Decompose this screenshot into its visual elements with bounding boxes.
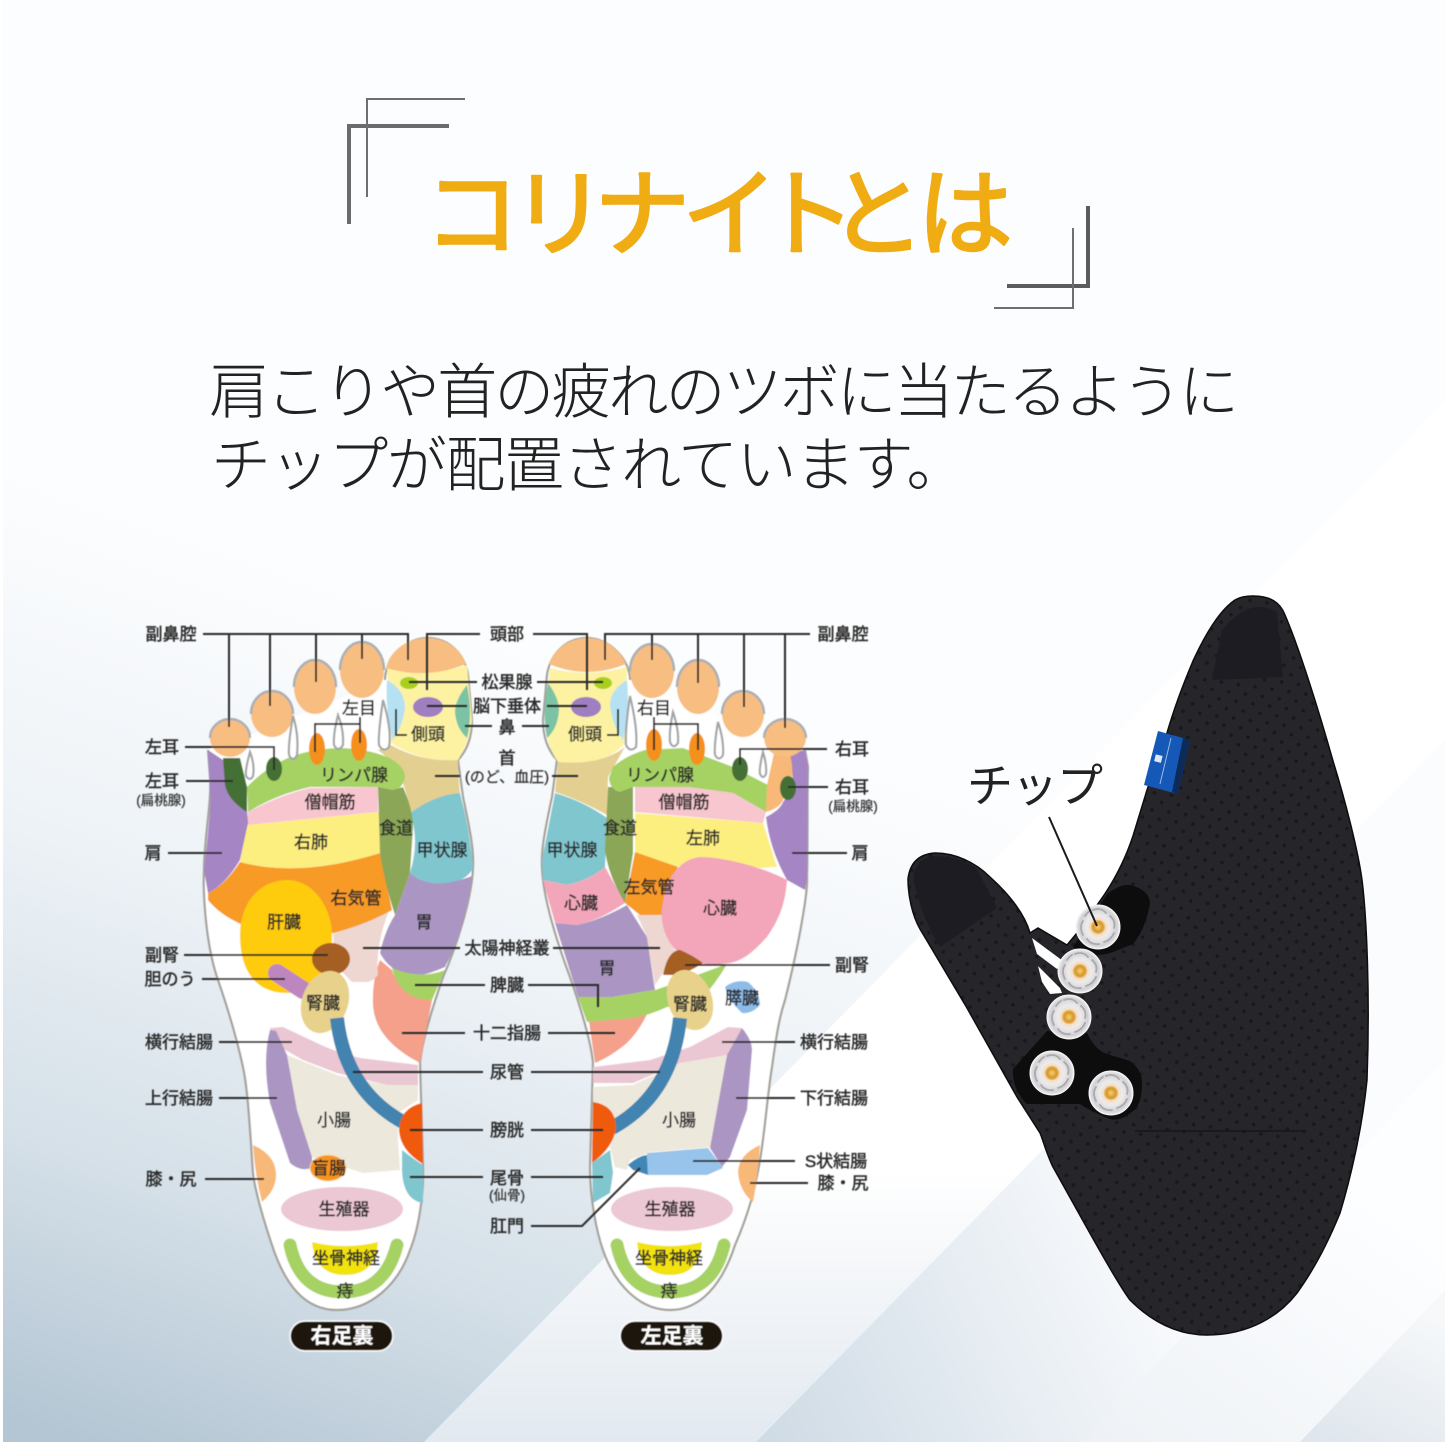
organ labels: 食道 [379,819,413,838]
label: 肩 [144,844,222,863]
zone: descending colon [710,1028,752,1167]
label: 尿管: 尿管 [490,1063,524,1082]
zone: solar plexus [637,915,677,985]
zone: heart small [543,867,625,925]
organ labels: 小腸 [317,1111,351,1130]
organ labels: 腎臓 [306,994,340,1013]
zone: transverse colon [593,1027,742,1083]
zone: bladder [399,1103,423,1164]
zone: hip [738,1145,760,1202]
zone: tonsil [223,758,247,812]
centre labels between feet [353,625,660,1236]
foot name pill: 右足裏 [290,1321,393,1351]
label: 下行結腸 [736,1089,868,1108]
zone: small intestine [287,1055,418,1173]
zone: lung [240,812,380,868]
organ labels [267,766,468,1301]
label: 副鼻腔 left [146,625,408,727]
label: 尾骨 [410,1169,603,1203]
label: 膝・尻 [146,1170,264,1189]
label: 右目 [637,699,698,750]
zone: pituitary [571,697,601,717]
organ labels [546,766,759,1301]
zone: adrenal [312,943,350,975]
zone: pancreas [725,981,760,1013]
label: 横行結腸: 横行結腸 [800,1033,868,1052]
label: 尾骨: 尾骨 [490,1169,524,1188]
title: コリナイトとは [424,162,1013,269]
zone: coccyx [592,1150,613,1203]
label: 側頭 [396,709,445,744]
zone: nose [545,683,559,738]
label: 膝・尻: 膝・尻 [818,1174,868,1193]
label: 頭部 [427,625,587,690]
zone: sigmoid colon [647,1148,723,1175]
zone: trachea [208,853,392,933]
label: 下行結腸: 下行結腸 [800,1089,868,1108]
organ labels: 生殖器 [318,1200,370,1219]
zone: esophagus [605,787,633,903]
zone: trapezius [247,787,378,825]
organ labels: 僧帽筋 [658,793,710,812]
label: 胆のう: 胆のう [144,970,196,989]
label: 鼻: 鼻 [498,718,516,737]
body text: 肩こりや首の疲れのツボに当たるように [209,359,1239,426]
zone: duodenum [588,1012,648,1063]
label: 側頭: 側頭 [568,725,602,744]
organ labels: 腎臓 [673,995,707,1014]
zone: liver [240,880,332,993]
organ labels: 生殖器 [644,1200,696,1219]
label: 肛門: 肛門 [490,1217,524,1236]
seam [1135,1130,1305,1132]
label: 側頭 [568,709,618,744]
organ labels: 膵臓 [725,989,759,1008]
zone: neck [378,745,460,813]
zone: genitals [611,1187,733,1231]
label: 左耳 扁桃腺: 左耳 [145,772,179,791]
label: 肛門 [490,1168,640,1236]
label: 脾臓: 脾臓 [490,976,524,995]
zone: sciatic [312,1242,378,1275]
zone: trachea [625,852,678,915]
organ labels: 左気管 [624,878,674,897]
label: 左目 [315,699,376,752]
zone: duodenum [373,960,432,1063]
zone: big toe sinus [549,638,626,672]
toe gaps [626,696,766,777]
foot name pill: 左足裏: 左足裏 [640,1325,704,1348]
label: 太陽神経叢: 太陽神経叢 [464,939,550,958]
label: 上行結腸 [145,1089,277,1108]
velcro patch left [913,856,997,947]
label: 首: 首 [498,749,516,768]
blue brand tag [1144,731,1190,794]
toe gaps [246,700,390,779]
organ labels: 食道 [603,819,637,838]
toes [630,644,806,757]
zone: kidney [292,964,358,1040]
orange oval eye points [646,729,705,765]
strap holes [1032,938,1063,994]
organ labels: リンパ腺 [320,766,388,785]
chip backing upper [1073,885,1150,955]
zone: small intestine [593,1055,727,1170]
organ labels: 盲腸 [312,1159,346,1178]
label: 右耳: 右耳 [835,740,869,759]
organ labels: 胃 [598,959,616,978]
chip backing lower [1013,1031,1142,1120]
label: 膀胱: 膀胱 [490,1121,524,1140]
label: 右耳 扁桃腺 [788,778,878,814]
organ labels: 心臓 [564,894,598,913]
organ labels: 右肺 [294,833,328,852]
organ labels: 小腸 [662,1111,696,1130]
zone: stomach [555,905,655,997]
zone: solar plexus [333,908,390,982]
zone: sciatic [637,1242,702,1275]
zone: hemorrhoid arc [617,1245,724,1292]
zone: hemorrhoid arc [290,1245,397,1292]
ear points [732,757,796,800]
zone: nose [455,685,470,738]
callout: チップ with pointer line: チップ [967,760,1103,812]
label: 副鼻腔 right [605,625,868,728]
zone: cecum [310,1155,346,1181]
label: 尾骨: (仙骨) [489,1188,525,1203]
zone: head yellow [545,667,627,763]
zone: transverse colon [270,1027,418,1085]
label: 横行結腸: 横行結腸 [145,1033,213,1052]
zone: temple blue [610,680,628,740]
zone: pituitary [413,697,443,717]
label: 首: (のど、血圧) [465,769,549,786]
label: 首 [435,749,578,786]
label: 膝・尻 [750,1174,868,1193]
label: 側頭: 側頭 [411,725,445,744]
label: 左耳 扁桃腺 [136,772,233,808]
zone: spleen [392,968,445,1000]
zone: esophagus [378,787,413,915]
zone: thyroid [410,793,473,887]
label: 右耳 扁桃腺: (扁桃腺) [828,799,878,814]
zone: head yellow [387,665,472,760]
zone: pineal [400,677,418,689]
foot name pill: 右足裏: 右足裏 [310,1325,374,1348]
foot diagram: right sole (shown left) [136,625,473,1351]
label: 脳下垂体: 脳下垂体 [473,697,541,716]
label: 頭部: 頭部 [490,625,524,644]
label: 膝・尻: 膝・尻 [146,1170,196,1189]
label: 副腎: 副腎 [145,946,179,965]
sole outline [542,638,808,1310]
product photo: black pad [908,596,1368,1335]
label: 左耳: 左耳 [145,738,179,757]
label: 肩: 肩 [144,844,162,863]
zone: lung [635,813,777,868]
zone: lymph [609,748,768,812]
pad body [908,596,1368,1335]
label: 副鼻腔 left: 副鼻腔 [146,625,196,644]
organ labels: 甲状腺 [546,841,598,860]
title bracket: top left [349,99,464,222]
zone: bladder [592,1102,616,1163]
label: 右耳 [740,740,869,765]
sole outline [204,638,473,1310]
zone: kidney [659,963,721,1037]
label: S状結腸: S状結腸 [805,1152,867,1171]
organ labels: 心臓 [703,899,737,918]
organ labels: 痔 [660,1282,678,1301]
label: 左耳 [145,738,274,770]
massage chips [1030,905,1133,1115]
zone: thyroid [542,793,607,885]
zone: spleen [578,964,727,1022]
zone: ureter [337,1018,403,1122]
zone: ureter [612,1018,680,1128]
foot diagram: left sole (shown right) [542,625,878,1351]
velcro patch top [1212,607,1283,680]
body text [209,359,1239,499]
organ labels: 痔 [336,1282,354,1301]
zone: anus [628,1155,648,1175]
label: 十二指腸: 十二指腸 [473,1024,541,1043]
zone: gallbladder [277,973,303,990]
label: 肩: 肩 [852,844,868,863]
zone: shoulder orange [766,735,793,812]
ear point [266,757,282,781]
title bracket: bottom right [995,208,1088,308]
label: 右耳 扁桃腺: 右耳 [835,778,869,797]
label: 脾臓 [415,976,598,1007]
organ labels: 僧帽筋 [304,793,356,812]
zone: hip [253,1145,276,1202]
label: 鼻 [465,718,549,737]
label: 右目: 右目 [637,699,671,718]
organ labels: リンパ腺 [626,766,694,785]
zone: temple blue [387,680,405,740]
organ labels: 胃 [416,913,432,932]
label: 肩 [792,844,868,863]
organ labels: 坐骨神経 [635,1249,703,1268]
label: 左耳 扁桃腺: (扁桃腺) [136,793,186,808]
orange oval eye points [309,729,367,765]
zone: big toe sinus [386,638,466,673]
zone: ascending colon [266,1030,312,1169]
zone: heart large [662,857,787,964]
zone: pineal [594,677,612,689]
label: 副腎: 副腎 [835,956,869,975]
organ labels: 甲状腺 [416,841,468,860]
organ labels: 肝臓 [267,913,301,932]
zone: neck [555,747,625,815]
zone: trapezius [635,787,766,823]
label: 松果腺: 松果腺 [482,673,532,692]
zone: stomach [380,873,472,976]
zone: shoulder purple [766,750,808,890]
label: 上行結腸: 上行結腸 [145,1089,213,1108]
zone: adrenal [663,950,703,975]
label: 左目: 左目 [342,699,376,718]
organ labels: 左肺 [686,829,720,848]
zone: genitals [281,1187,403,1231]
zone: lymph [247,748,405,812]
callout: チップ with pointer line [967,760,1103,926]
body text: チップが配置されています。 [211,432,965,499]
foot name pill: 左足裏 [620,1321,723,1351]
organ labels: 坐骨神経 [312,1249,380,1268]
label: 副鼻腔 right: 副鼻腔 [818,625,868,644]
organ labels: 右気管 [330,889,382,908]
zone: coccyx [402,1150,423,1203]
toes [210,642,384,757]
zone: shoulder [204,750,248,893]
